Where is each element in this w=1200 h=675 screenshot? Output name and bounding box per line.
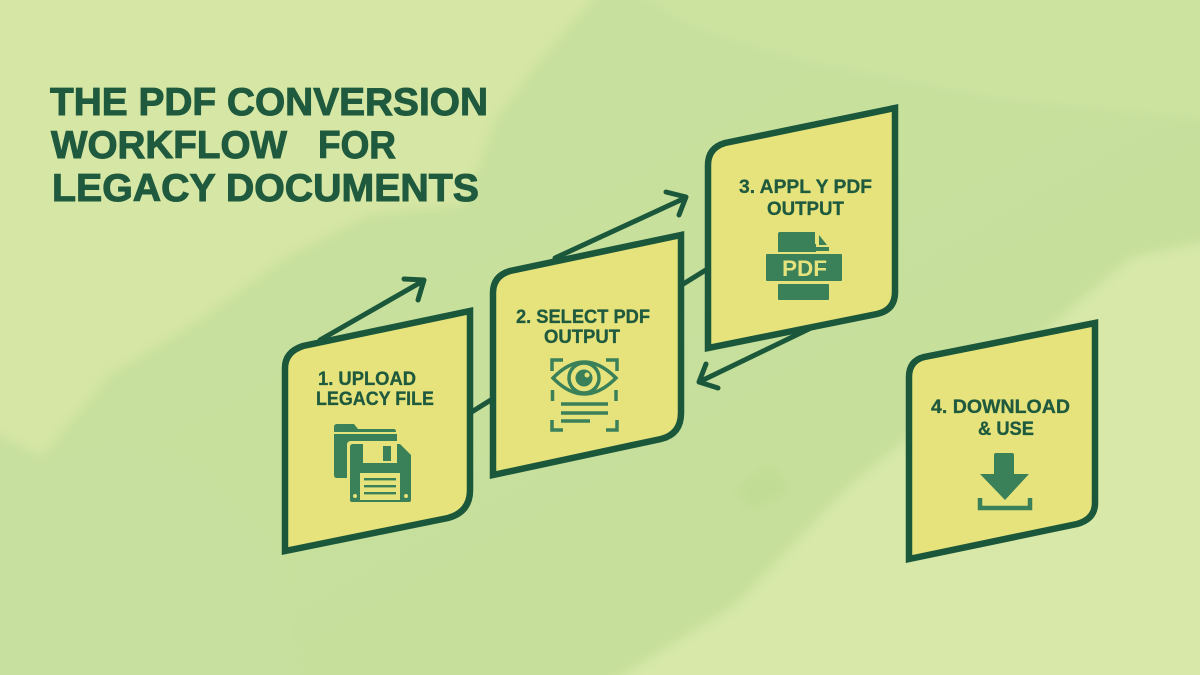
step 4 label (931, 397, 1070, 440)
icon: folder and floppy disk (334, 424, 411, 502)
title: LEGACY DOCUMENTS (52, 167, 479, 210)
step 1 label: LEGACY FILE (316, 389, 434, 410)
step 2 label: OUTPUT (544, 327, 620, 348)
title: FOR (318, 124, 396, 167)
step 2 label (516, 307, 650, 348)
arrow: connector step 2 to step 3 (680, 268, 709, 286)
step 3 label: OUTPUT (767, 199, 844, 220)
title (50, 81, 488, 210)
step 4 label: 4. DOWNLOAD (931, 397, 1070, 418)
icon: pdf document (766, 232, 842, 300)
icon: download arrow (980, 453, 1030, 508)
step 2 label: 2. SELECT PDF (516, 307, 650, 328)
step 3 label (739, 177, 872, 220)
step 1 label (316, 369, 434, 410)
panel: step 1 upload legacy file (285, 311, 470, 551)
arrow: upward from step 1 (320, 279, 424, 340)
title: WORKFLOW (51, 124, 287, 167)
panel: step 3 apply pdf output (708, 108, 895, 348)
step 1 label: 1. UPLOAD (318, 369, 416, 390)
arrow: connector step 1 to step 2 (470, 398, 494, 413)
icon: eye scan document (552, 360, 617, 430)
panel: step 2 select pdf output (493, 235, 681, 475)
step 3 label: 3. APPL Y PDF (739, 177, 872, 198)
step 4 label: & USE (978, 419, 1034, 440)
arrow: upward from step 2 (555, 192, 686, 258)
title: THE PDF CONVERSION (50, 81, 488, 124)
icon: pdf document: PDF (782, 256, 827, 281)
arrow: back from step 3 to step 2 (699, 327, 813, 388)
panel: step 4 download and use (909, 323, 1095, 559)
